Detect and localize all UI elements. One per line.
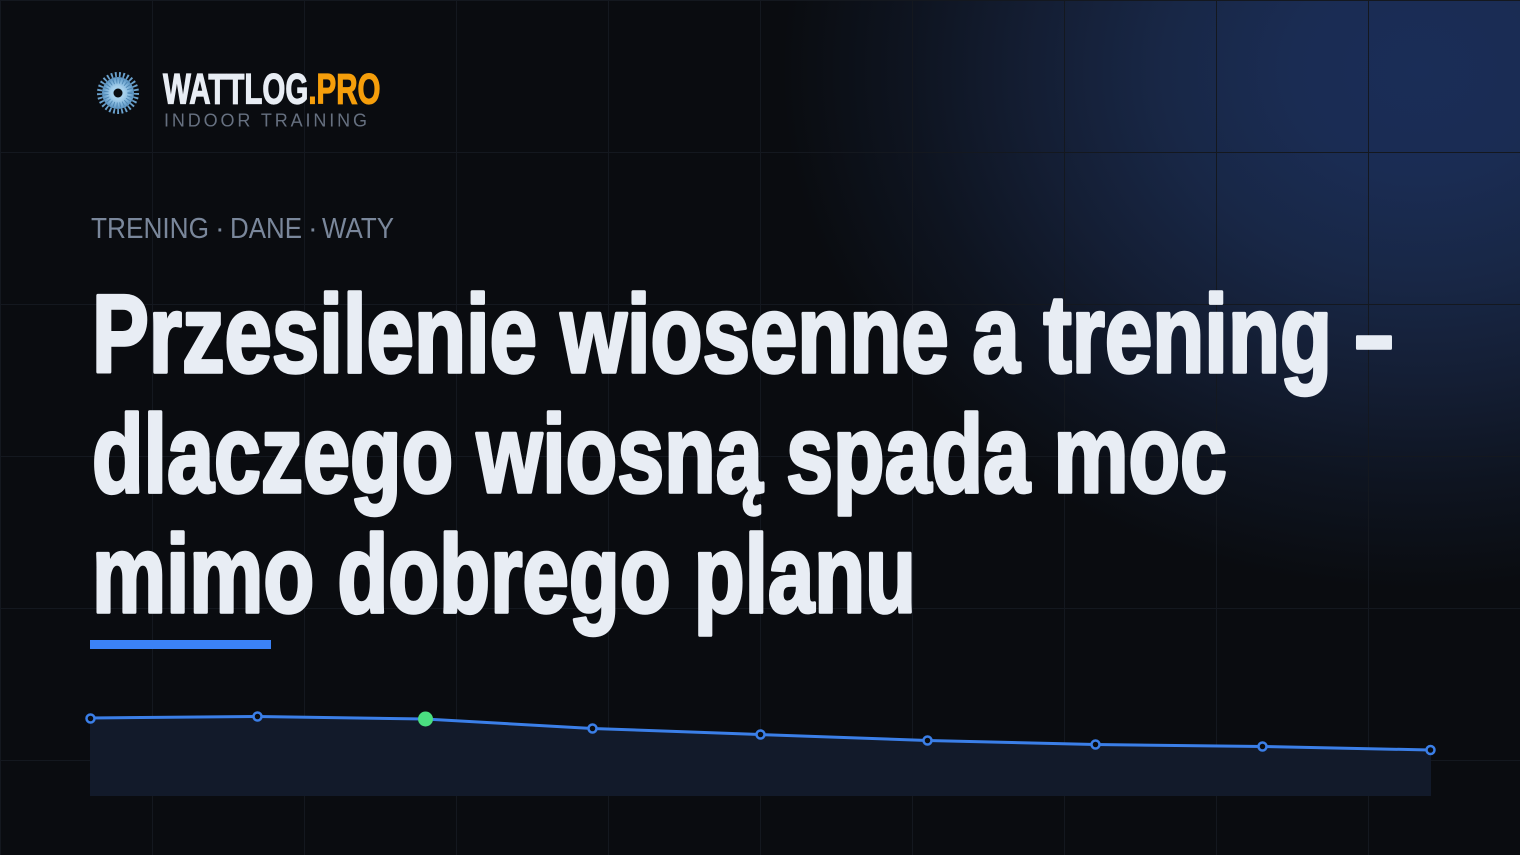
title: – [1355, 273, 1393, 396]
eyebrow text: TRENING [91, 213, 209, 245]
icon: cassette gear logo [100, 74, 136, 112]
eyebrow text: · [308, 213, 318, 245]
title [92, 273, 1393, 636]
highlighted data point [418, 712, 433, 726]
title: mimo dobrego planu [92, 513, 916, 636]
logo wordmark: WATTLOG.PRO [163, 66, 380, 114]
chart data points [86, 712, 1434, 754]
logo tagline: INDOOR TRAINING [164, 110, 367, 130]
eyebrow text: WATY [322, 213, 394, 245]
eyebrow text [91, 213, 394, 245]
eyebrow text: · [215, 213, 225, 245]
line chart: declining power [86, 712, 1434, 796]
eyebrow text: DANE [230, 213, 302, 245]
chart line [90, 716, 1430, 750]
title underline accent [90, 640, 271, 649]
chart area fill [90, 716, 1431, 796]
